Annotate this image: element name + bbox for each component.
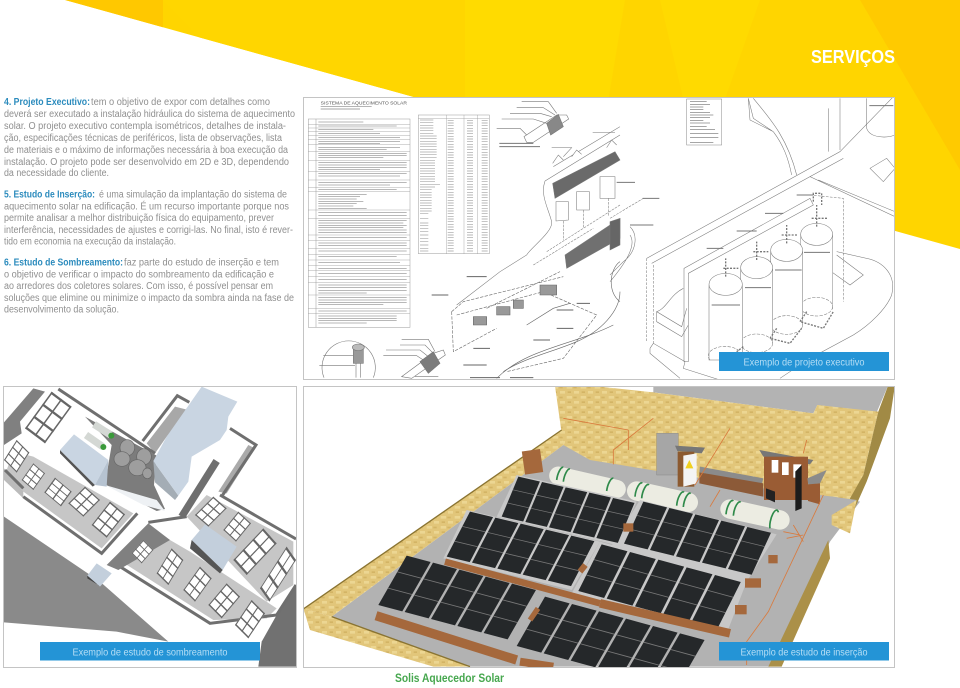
small building bbox=[60, 434, 108, 487]
pipe detail bottom bbox=[383, 339, 445, 378]
solar collector rows bbox=[378, 477, 771, 688]
sand block bbox=[832, 500, 857, 533]
back wall bbox=[555, 386, 878, 500]
observations table bbox=[308, 119, 410, 327]
text block: estudo de inserção bbox=[4, 190, 293, 248]
text block: projeto executivo: instalação. O projeto pode ser desenvolvido em 2D e 3D, dependendo bbox=[4, 157, 289, 168]
text block: estudo de sombreamento: soluções que elimine ou minimize o impacto da sombra ainda na fase de bbox=[4, 293, 294, 304]
vent detail circle bbox=[319, 341, 375, 378]
isometric plumbing floor bbox=[432, 262, 620, 378]
text block: projeto executivo: de materiais e o máximo de informações necessária à boa execução da bbox=[4, 145, 288, 156]
panel: estudo de sombreamento model bbox=[4, 386, 296, 668]
text block: estudo de inserção: interferência, necessidades de ajustes e corrigi-las. No final, isto é rever- bbox=[4, 225, 293, 236]
panel frames bbox=[443, 475, 777, 633]
text block: projeto executivo: solar. O projeto executivo contempla isométricos, detalhes de instala- bbox=[4, 121, 286, 132]
storage tanks bbox=[708, 193, 833, 360]
white tanks bbox=[86, 424, 114, 450]
panel: estudo de inserção model bbox=[303, 385, 895, 688]
caption: exemplo de projeto executivo: Exemplo de projeto executivo bbox=[744, 356, 865, 368]
yellow header background bbox=[65, 0, 960, 250]
text block: estudo de inserção: tido em economia na execução da instalação. bbox=[4, 236, 176, 248]
caption: exemplo de estudo de sombreamento: Exemplo de estudo de sombreamento bbox=[72, 646, 228, 658]
text block: estudo de inserção: permite analisar a melhor distribuição física do equipamento, prever bbox=[4, 213, 275, 224]
building outlines bbox=[5, 389, 296, 623]
caption: exemplo de estudo de inserção bbox=[719, 642, 889, 660]
panel: projeto executivo drawing bbox=[304, 95, 895, 380]
tall building bbox=[153, 387, 237, 500]
text block: estudo de inserção: é uma simulação da implantação do sistema de bbox=[99, 190, 287, 200]
text block: projeto executivo bbox=[4, 97, 295, 179]
caption: exemplo de estudo de sombreamento bbox=[40, 642, 260, 660]
brick cabinets bbox=[699, 450, 827, 511]
roof slab bbox=[653, 385, 888, 413]
tanks bbox=[557, 467, 780, 528]
text block: projeto executivo: da necessidade do cliente. bbox=[4, 168, 109, 179]
caption: exemplo de projeto executivo bbox=[719, 352, 889, 371]
text block: projeto executivo: deverá ser executado a instalação hidráulica do sistema de aquecimento bbox=[4, 109, 295, 120]
courtyard shading bbox=[147, 407, 188, 453]
legend bbox=[687, 99, 722, 145]
text block: projeto executivo: 4. Projeto Executivo: bbox=[4, 97, 90, 108]
gray floor bbox=[332, 445, 860, 667]
brick strips bbox=[376, 562, 730, 667]
roof walkway bbox=[820, 495, 856, 504]
lower building bbox=[190, 524, 237, 573]
right side wall bbox=[850, 385, 895, 512]
isometric wall with collectors bbox=[457, 127, 620, 305]
wall props bbox=[657, 433, 705, 487]
caption: exemplo de estudo de inserção: Exemplo de estudo de inserção bbox=[740, 646, 868, 658]
heading: serviços: SERVIÇOS bbox=[811, 47, 895, 67]
brand: solis aquecedor solar: Solis Aquecedor Solar bbox=[395, 671, 504, 685]
gray roof shading bbox=[7, 452, 293, 620]
orange pipes bbox=[563, 418, 823, 665]
text block: projeto executivo: tem o objetivo de expor com detalhes como bbox=[91, 97, 270, 108]
drawing title: SISTEMA DE AQUECIMENTO SOLAR bbox=[321, 100, 407, 106]
text block: estudo de sombreamento bbox=[4, 258, 294, 316]
stair box bbox=[87, 563, 112, 587]
right courtyard strip bbox=[218, 445, 255, 493]
large gray tanks bbox=[114, 440, 152, 479]
text block: estudo de inserção: 5. Estudo de Inserção: bbox=[4, 190, 95, 200]
tanks and piping bbox=[610, 95, 895, 380]
collector arrays bbox=[4, 392, 296, 638]
text block: estudo de sombreamento: 6. Estudo de Sombreamento: bbox=[4, 258, 123, 268]
floor highlight bbox=[105, 485, 165, 511]
corridor bbox=[107, 523, 170, 570]
text block: estudo de sombreamento: ao arredores dos coletores solares. Com isso, é possível pensar em bbox=[4, 281, 273, 292]
mechanical floor bbox=[85, 417, 165, 511]
pipe detail top bbox=[497, 102, 569, 147]
text block: estudo de sombreamento: faz parte do estudo de inserção e tem bbox=[124, 258, 279, 268]
ground shadows bbox=[4, 388, 296, 667]
right parapet bbox=[768, 540, 830, 667]
materials table bbox=[418, 115, 489, 254]
text block: estudo de sombreamento: o objetivo de verificar o impacto do sombreamento da edificação e bbox=[4, 270, 274, 280]
junction boxes bbox=[522, 449, 778, 614]
text block: estudo de inserção: aquecimento solar na edificação. É um recurso importante porque nos bbox=[4, 200, 289, 212]
left parapet bbox=[303, 430, 563, 667]
text block: projeto executivo: ção, especificações técnicas de periféricos, lista de observações, lista bbox=[4, 133, 282, 144]
text block: estudo de sombreamento: desenvolvimento da solução. bbox=[4, 304, 119, 316]
